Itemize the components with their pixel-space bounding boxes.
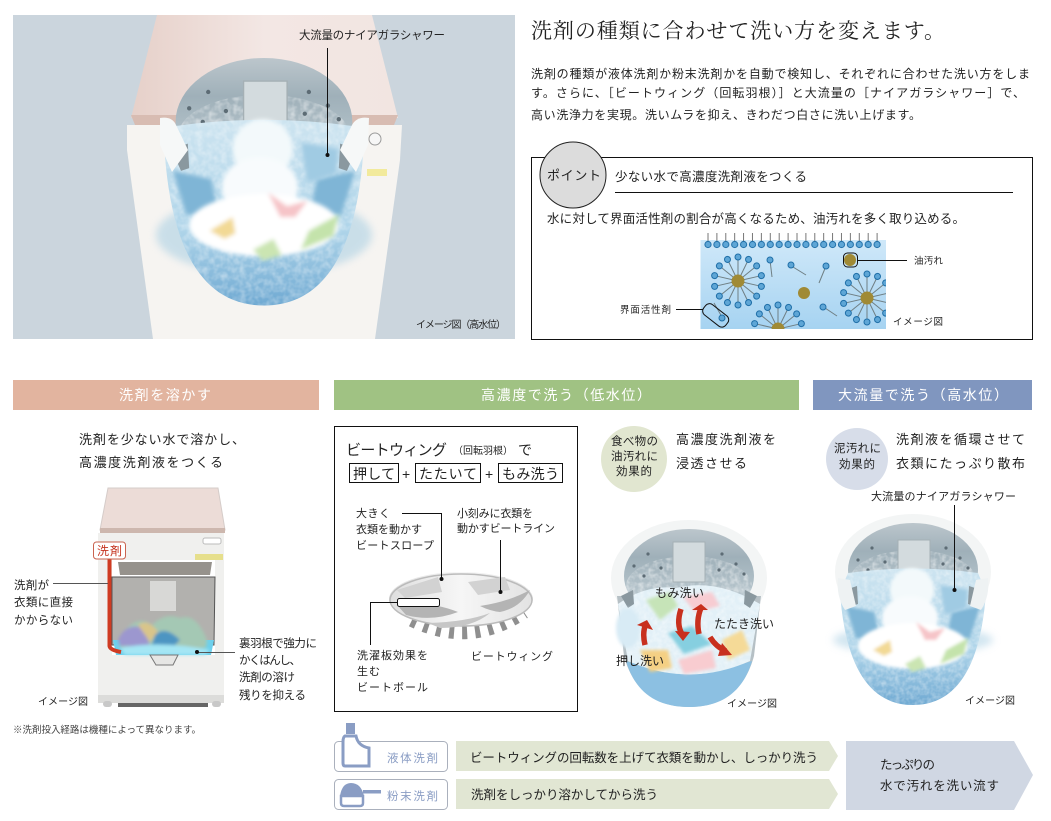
arrow bar: liquid process: ビートウィングの回転数を上げて衣類を動かし、しっかり洗う bbox=[470, 750, 818, 765]
callout: beat line: 動かすビートライン bbox=[457, 521, 555, 535]
text block: circulate: 洗剤液を循環させて bbox=[896, 432, 1025, 447]
badge: oily stains: 効果的 bbox=[616, 464, 652, 478]
labels: push, beat, rub: 押して bbox=[353, 466, 395, 482]
icon: bottle bbox=[343, 723, 369, 766]
illustration: drum with high water level bbox=[165, 58, 363, 306]
arrow block: rinse bbox=[846, 741, 1033, 810]
caption: イメージ図 bbox=[727, 698, 777, 710]
text block: dissolve description bbox=[79, 432, 245, 470]
icon: washing machine body bbox=[127, 15, 402, 339]
callout: beat line: 小刻みに衣類を bbox=[457, 506, 533, 520]
illustration: washer cutaway bbox=[94, 488, 225, 707]
illustration: beat wing pulsator bbox=[389, 572, 533, 632]
text block: concentrated liquid: 高濃度洗剤液を bbox=[676, 432, 776, 447]
badge: mud stains bbox=[826, 428, 888, 490]
callout: not directly on clothes: 洗剤が bbox=[14, 578, 50, 592]
heading: beat wing bbox=[346, 442, 532, 459]
callout: beat slope: ビートスロープ bbox=[356, 539, 434, 552]
arrow bar: liquid process bbox=[456, 741, 838, 771]
labels: push, beat, rub: たたいて bbox=[419, 466, 477, 482]
labels: washing motions: 押し洗い bbox=[616, 654, 664, 668]
badge: oily stains bbox=[601, 426, 667, 492]
arrows: washing motion bbox=[637, 604, 732, 656]
callout: beat ball: 洗濯板効果を bbox=[357, 648, 428, 662]
heading: beat wing: ビートウィング bbox=[346, 442, 447, 459]
callout: beat ball: ビートボール bbox=[357, 681, 428, 694]
text block: intro: 高い洗浄力を実現。洗いムラを抑え、きわだつ白さに洗い上げます。 bbox=[531, 107, 921, 122]
heading: title: 洗剤の種類に合わせて洗い方を変えます。 bbox=[531, 19, 945, 43]
heading bar: high concentration bbox=[334, 380, 799, 410]
caption: イメージ図 bbox=[965, 695, 1015, 707]
heading: beat wing: （回転羽根） bbox=[453, 444, 513, 457]
heading bar: large flow bbox=[813, 380, 1032, 410]
callout: beat slope bbox=[356, 506, 444, 581]
text block: intro bbox=[531, 66, 1030, 122]
labels: push, beat, rub: もみ洗う bbox=[502, 466, 559, 482]
text block: concentrated liquid: 浸透させる bbox=[676, 456, 747, 471]
panel: hero washing machine illustration bbox=[13, 15, 515, 339]
badge: mud stains: 泥汚れに bbox=[834, 442, 881, 455]
leader: Niagara shower bbox=[952, 505, 956, 592]
label: beat wing: ビートウィング bbox=[471, 649, 553, 663]
arrow bar: powder process bbox=[456, 779, 838, 809]
text block: circulate bbox=[896, 432, 1025, 471]
label: oil stain: 油汚れ bbox=[914, 255, 943, 267]
heading bar: large flow: 大流量で洗う（高水位） bbox=[838, 387, 1008, 403]
badge: point bbox=[540, 142, 606, 208]
heading: beat wing: で bbox=[518, 442, 532, 458]
label: oil stain bbox=[858, 255, 943, 267]
callout: back blades: 裏羽根で強力に bbox=[239, 637, 317, 650]
icon: scoop bbox=[340, 783, 381, 806]
heading bar: dissolve bbox=[13, 380, 319, 410]
label: detergent bbox=[94, 542, 126, 559]
legend: powder detergent: 粉末洗剤 bbox=[387, 789, 438, 803]
labels: push, beat, rub: + bbox=[402, 466, 410, 482]
callout: back blades bbox=[195, 637, 317, 702]
illustration: low water drum bbox=[611, 520, 774, 707]
panel: beat wing bbox=[334, 426, 578, 712]
caption: イメージ図 bbox=[38, 696, 88, 708]
heading: point: 少ない水で高濃度洗剤液をつくる bbox=[615, 169, 807, 184]
footnote: ※洗剤投入経路は機種によって異なります。 bbox=[13, 724, 201, 736]
legend: liquid detergent bbox=[334, 723, 448, 772]
label: Niagara shower: 大流量のナイアガラシャワー bbox=[299, 28, 445, 42]
callout: back blades: 洗剤の溶け bbox=[239, 671, 295, 684]
panel: point box bbox=[532, 142, 1032, 356]
caption: イメージ図（高水位） bbox=[416, 318, 506, 331]
callout: back blades: かくはんし、 bbox=[239, 654, 301, 667]
callout: not directly on clothes: 衣類に直接 bbox=[14, 595, 74, 609]
labels: push, beat, rub: + bbox=[485, 466, 493, 482]
badge: mud stains: 効果的 bbox=[839, 457, 875, 471]
callout: beat slope: 大きく bbox=[356, 506, 390, 520]
badge: point: ポイント bbox=[547, 168, 601, 183]
legend: powder detergent bbox=[334, 780, 448, 810]
callout: back blades: 残りを抑える bbox=[239, 688, 306, 702]
illustration: water spray bbox=[156, 195, 372, 275]
arrow block: rinse: 水で汚れを洗い流す bbox=[880, 779, 999, 793]
label: surfactant bbox=[620, 304, 703, 316]
badge: oily stains: 油汚れに bbox=[611, 449, 658, 463]
callout: beat ball: 生む bbox=[357, 664, 380, 678]
labels: washing motions: たたき洗い bbox=[714, 617, 774, 631]
caption: イメージ図 bbox=[893, 317, 943, 328]
text: point description: 水に対して界面活性剤の割合が高くなるため、油汚れを多く取り込める。 bbox=[547, 211, 965, 226]
callout: not directly on clothes: かからない bbox=[14, 614, 73, 627]
callout: beat ball bbox=[357, 598, 440, 694]
text block: dissolve description: 洗剤を少ない水で溶かし、 bbox=[79, 432, 245, 447]
labels: push, beat, rub bbox=[350, 464, 562, 482]
labels: washing motions bbox=[616, 586, 774, 668]
illustration: high water drum bbox=[833, 514, 993, 705]
callout: not directly on clothes bbox=[14, 578, 108, 627]
arrow bar: powder process: 洗剤をしっかり溶かしてから洗う bbox=[471, 788, 658, 802]
label: Niagara shower bbox=[299, 28, 445, 157]
legend: liquid detergent: 液体洗剤 bbox=[387, 751, 438, 765]
text block: concentrated liquid bbox=[676, 432, 776, 471]
arrow block: rinse: たっぷりの bbox=[880, 758, 935, 772]
label: surfactant: 界面活性剤 bbox=[620, 304, 671, 316]
callout: beat slope: 衣類を動かす bbox=[356, 522, 422, 536]
label: Niagara shower: 大流量のナイアガラシャワー bbox=[871, 489, 1016, 503]
callout: beat line bbox=[457, 506, 555, 594]
text block: intro: 洗剤の種類が液体洗剤か粉末洗剤かを自動で検知し、それぞれに合わせた洗い方をしま bbox=[531, 66, 1030, 81]
chart: surfactant diagram bbox=[700, 233, 886, 329]
badge: oily stains: 食べ物の bbox=[611, 434, 658, 448]
heading bar: dissolve: 洗剤を溶かす bbox=[119, 387, 211, 403]
label: detergent: 洗剤 bbox=[97, 544, 122, 558]
illustration: drum rim bbox=[160, 118, 369, 172]
text block: intro: す。さらに、［ビートウィング（回転羽根）］と大流量の［ナイアガラシャワー］で、 bbox=[531, 86, 1025, 100]
heading bar: high concentration: 高濃度で洗う（低水位） bbox=[481, 387, 651, 403]
labels: washing motions: もみ洗い bbox=[655, 586, 704, 600]
text block: dissolve description: 高濃度洗剤液をつくる bbox=[79, 455, 223, 470]
text block: circulate: 衣類にたっぷり散布 bbox=[896, 456, 1025, 471]
